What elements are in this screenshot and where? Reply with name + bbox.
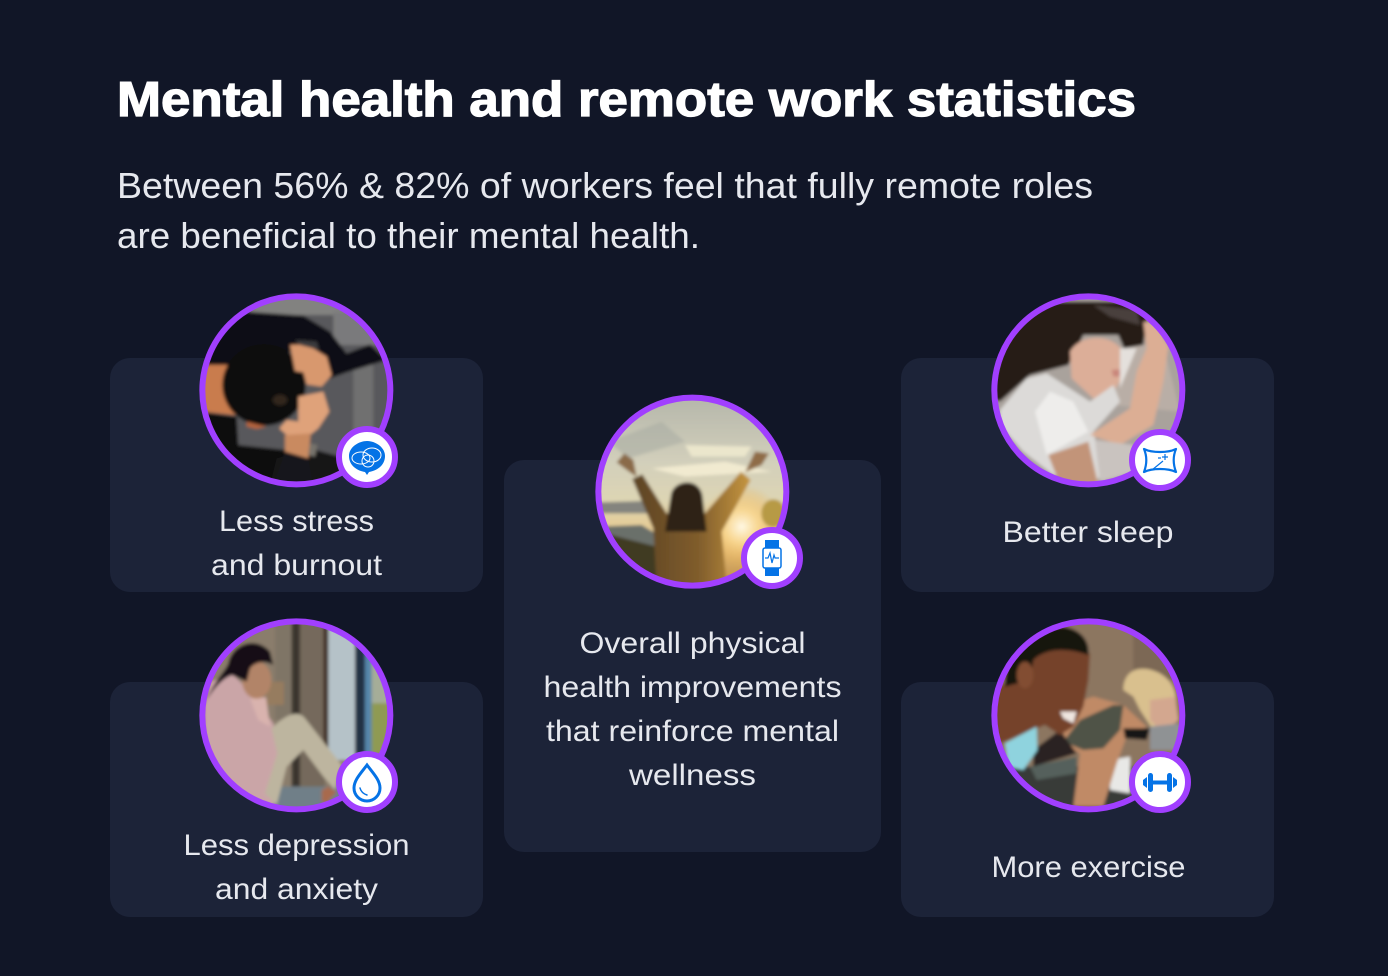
panel: less stress and burnout xyxy=(110,295,483,592)
title: Mental health and remote work statistics xyxy=(117,73,1136,127)
label xyxy=(544,627,842,792)
icon: pillow badge xyxy=(1132,432,1188,488)
photo: woman sleeping xyxy=(990,295,1190,485)
label: Less stress xyxy=(219,505,374,538)
label xyxy=(184,829,410,906)
panel: better sleep xyxy=(901,295,1274,592)
label: and anxiety xyxy=(215,873,378,906)
photo: woman by a window xyxy=(200,620,395,810)
icon: dumbbell badge xyxy=(1132,754,1188,810)
label: More exercise xyxy=(992,851,1186,884)
label: Overall physical xyxy=(580,627,806,660)
label: Less depression xyxy=(184,829,410,862)
icon: brain badge xyxy=(339,429,395,485)
panel: more exercise xyxy=(901,620,1274,917)
photo: person with raised arms at sunset xyxy=(595,395,792,586)
subtitle: are beneficial to their mental health. xyxy=(117,215,700,256)
label: health improvements xyxy=(544,671,842,704)
label: and burnout xyxy=(211,549,383,582)
icon: smartwatch badge xyxy=(744,530,800,586)
label: wellness xyxy=(628,759,756,792)
icon: water drop badge xyxy=(339,754,395,810)
label xyxy=(211,505,383,582)
photo: women exercising xyxy=(990,620,1190,810)
panel: less depression and anxiety xyxy=(110,620,483,917)
label: that reinforce mental xyxy=(546,715,839,748)
subtitle xyxy=(117,165,1093,256)
photo: man holding his head xyxy=(200,295,393,485)
panel: overall physical health xyxy=(504,395,881,852)
subtitle: Between 56% & 82% of workers feel that fully remote roles xyxy=(117,165,1093,206)
label: Better sleep xyxy=(1002,516,1174,549)
